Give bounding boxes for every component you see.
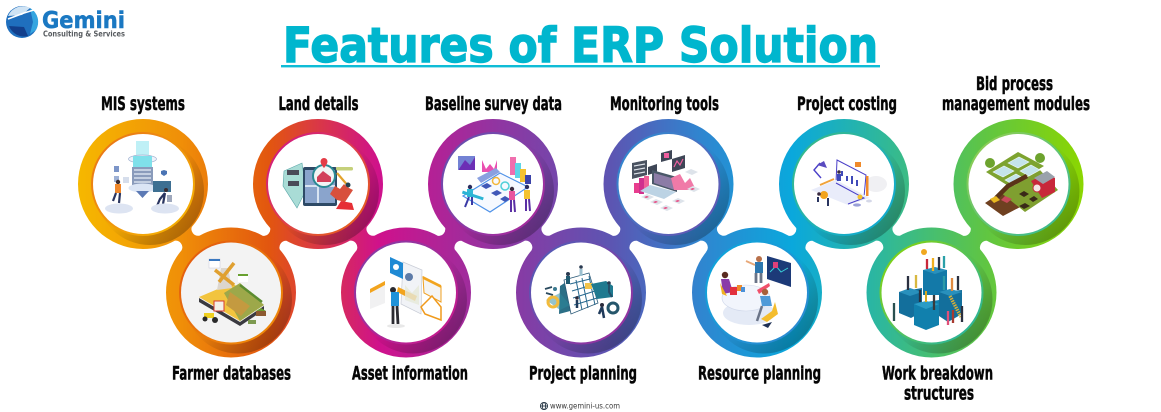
label: Work breakdown structures <box>882 362 993 404</box>
label: Land details: Land details <box>278 93 358 115</box>
logo name: Gemini <box>42 8 125 34</box>
panel: Bid process management modules <box>966 132 1080 245</box>
label: Monitoring tools: Monitoring tools <box>610 93 719 115</box>
panel: Farmer databases <box>179 240 292 354</box>
footer website <box>540 402 620 410</box>
panel: Resource planning <box>705 240 818 354</box>
icon: team meeting around table <box>720 256 791 328</box>
icon: laptop with floating dashboards <box>632 150 700 211</box>
logo tagline: Consulting & Services <box>43 30 125 38</box>
panel: Project costing <box>792 132 905 245</box>
ring band <box>70 110 1092 365</box>
logo <box>6 6 125 38</box>
label: Work breakdown structures: structures <box>904 382 974 404</box>
panel: Asset information <box>354 240 467 354</box>
icon: asset documents with person <box>370 257 441 328</box>
icon: globe <box>6 6 38 38</box>
label: Project costing: Project costing <box>797 93 897 115</box>
label: Work breakdown structures: Work breakdown <box>882 362 993 384</box>
label: Farmer databases: Farmer databases <box>172 362 291 384</box>
panel: Land details <box>266 132 379 245</box>
panel: Baseline survey data <box>441 132 554 245</box>
icon: web globe <box>540 402 548 410</box>
icon: laptop with costing charts <box>811 160 887 207</box>
label: Bid process management modules: Bid process <box>976 73 1053 95</box>
label: Asset information: Asset information <box>352 362 468 384</box>
label: Project planning: Project planning <box>529 362 637 384</box>
icon: calendar planning with gears <box>545 265 618 318</box>
panel: Project planning <box>529 240 642 354</box>
panel: Work breakdown structures <box>880 240 992 354</box>
icon: team climbing blue blocks <box>894 249 962 330</box>
icon: farm platform with windmill and tractor <box>199 259 266 326</box>
icon: data server with two users <box>105 141 179 214</box>
label: Baseline survey data: Baseline survey data <box>425 93 562 115</box>
title: Features of ERP Solution <box>283 18 878 74</box>
label: Resource planning: Resource planning <box>698 362 821 384</box>
label: MIS systems: MIS systems <box>101 93 185 115</box>
icon: tablet map with house and keys <box>283 158 354 210</box>
icon: survey dashboard with people <box>458 156 531 212</box>
website url: www.gemini-us.com <box>550 402 620 410</box>
panel: MIS systems <box>91 132 204 245</box>
panel: Monitoring tools <box>616 132 730 245</box>
label: Bid process management modules <box>942 73 1090 115</box>
icon: farm with greenhouses and barn <box>985 152 1058 216</box>
